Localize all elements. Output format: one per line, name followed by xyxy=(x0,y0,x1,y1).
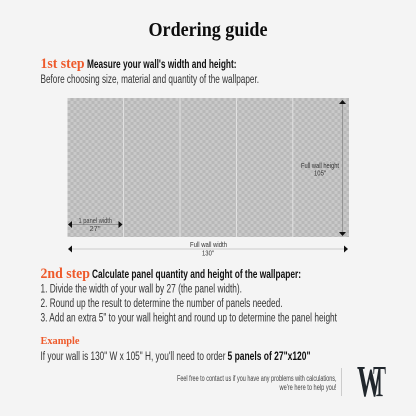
contact note xyxy=(177,374,336,392)
label: full wall width: 130" xyxy=(202,248,214,258)
example heading: Example xyxy=(40,336,80,347)
logo: WT: W xyxy=(357,357,382,406)
title: Ordering guide xyxy=(148,19,268,41)
arrow: 1 panel width xyxy=(68,221,122,228)
logo divider xyxy=(340,368,343,396)
step 1 heading: Measure your wall's width and height: xyxy=(87,59,236,71)
example text: If your wall is 130" W x 105" H, you'll need to order xyxy=(40,351,226,363)
contact note: Feel free to contact us if you have any problems with calculations, xyxy=(177,374,336,383)
step 2 instructions: 2. Round up the result to determine the number of panels needed. xyxy=(40,298,282,310)
contact note: we're here to help you! xyxy=(279,383,336,392)
step 2 heading xyxy=(40,266,301,282)
label: full wall height: Full wall height xyxy=(301,161,340,170)
step 1 heading: 1st step xyxy=(40,56,84,72)
label: full wall height xyxy=(301,161,340,178)
step 2 heading: 2nd step xyxy=(40,266,90,282)
label: 1 panel width: 27" xyxy=(89,224,101,233)
arrow: full wall width xyxy=(68,246,348,252)
step 2 heading: Calculate panel quantity and height of the wallpaper: xyxy=(92,269,301,281)
step 2 instructions: 1. Divide the width of your wall by 27 (the panel width). xyxy=(40,284,242,296)
wall diagram xyxy=(68,98,349,258)
logo: WT xyxy=(357,357,386,406)
step 1 description: Before choosing size, material and quantity of the wallpaper. xyxy=(40,74,259,86)
step 2 instructions xyxy=(40,284,338,324)
arrow: full wall height xyxy=(339,100,346,236)
example text: 5 panels of 27"x120" xyxy=(228,351,310,363)
label: full wall width: Full wall width xyxy=(190,240,227,249)
wall panels xyxy=(68,98,349,237)
step 1 heading xyxy=(40,56,236,72)
label: full wall height: 105" xyxy=(314,169,326,178)
label: 1 panel width: 1 panel width xyxy=(78,216,112,225)
label: 1 panel width xyxy=(78,216,112,233)
label: full wall width xyxy=(190,240,227,258)
text: T xyxy=(373,357,386,406)
